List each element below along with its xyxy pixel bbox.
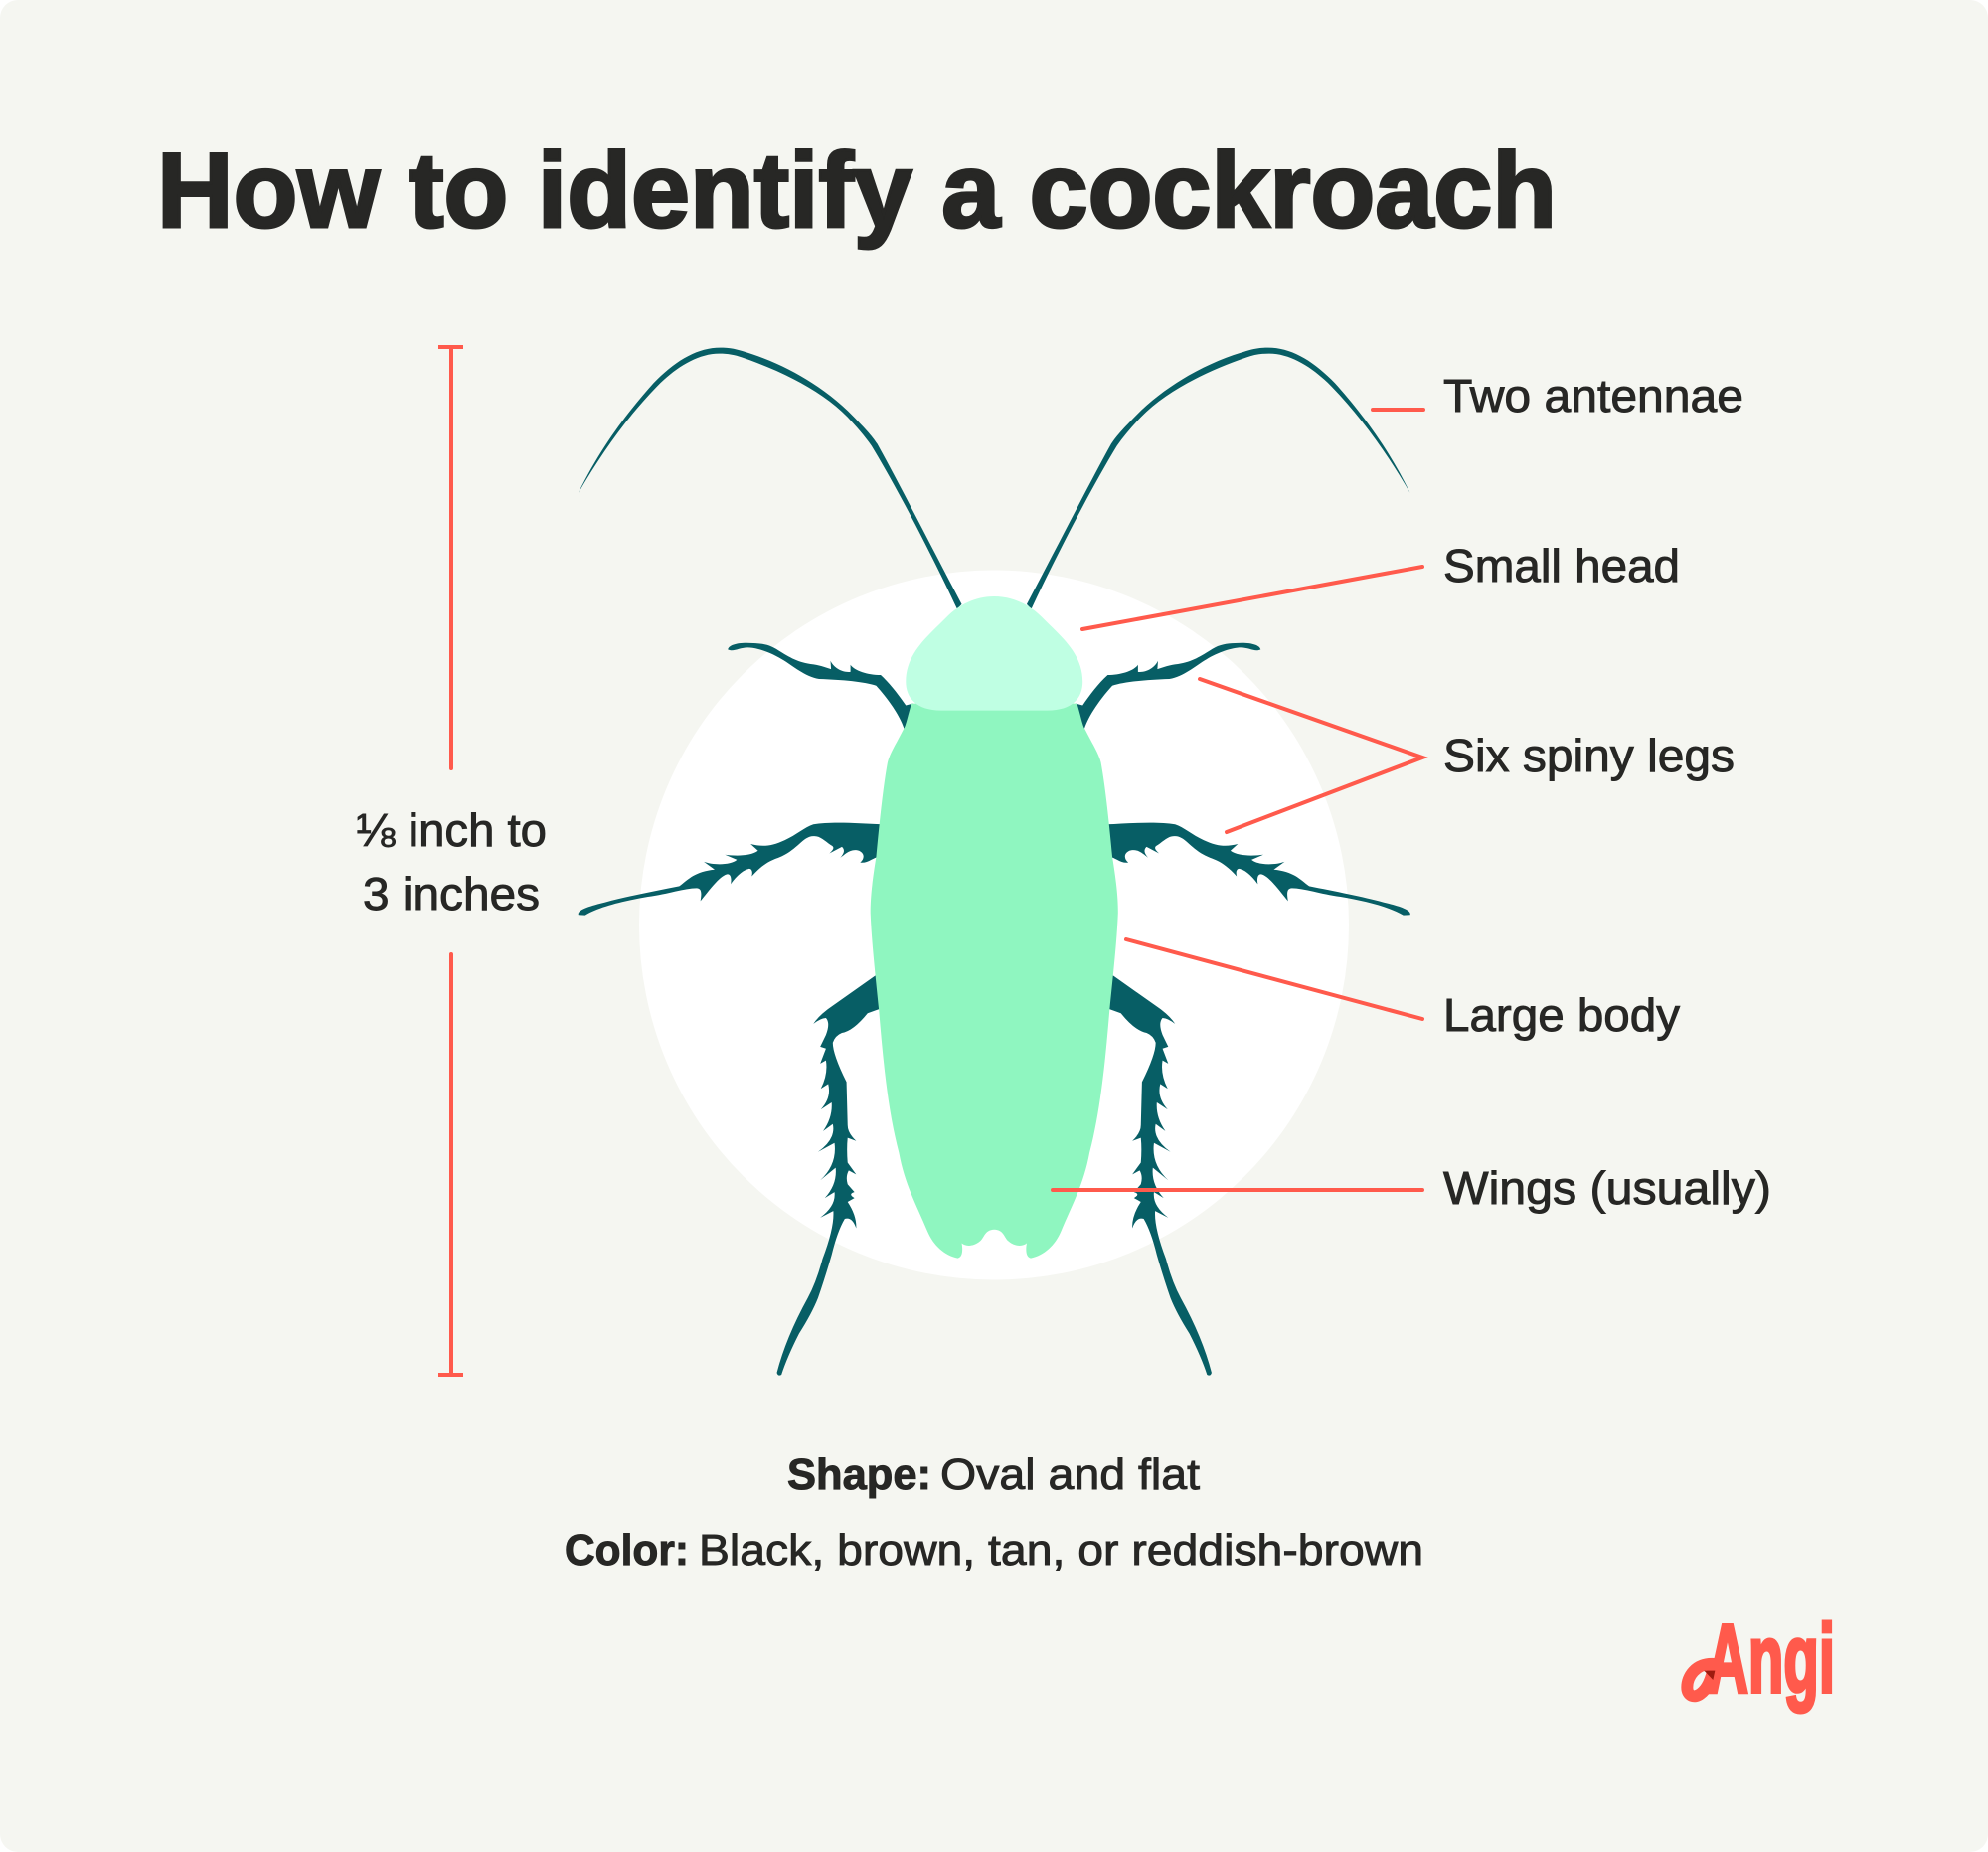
label: large body: Large body bbox=[1443, 989, 1680, 1041]
label: two antennae: Two antennae bbox=[1443, 370, 1743, 421]
shape description: Shape: bbox=[787, 1450, 931, 1499]
title: How to identify a cockroach bbox=[157, 130, 1557, 250]
right middle leg bbox=[1106, 823, 1410, 916]
white circle behind cockroach bbox=[639, 571, 1349, 1280]
left front leg bbox=[728, 643, 913, 731]
color description: Color: bbox=[565, 1526, 689, 1575]
cockroach body and wings bbox=[871, 704, 1118, 1259]
right front leg bbox=[1076, 643, 1260, 731]
shape description bbox=[787, 1450, 1200, 1499]
callout line: body bbox=[1126, 939, 1422, 1019]
label: small head: Small head bbox=[1443, 540, 1680, 591]
right hind leg bbox=[1103, 972, 1212, 1376]
shape description: Oval and flat bbox=[940, 1450, 1200, 1499]
right antenna bbox=[1027, 348, 1410, 609]
color description: Black, brown, tan, or reddish-brown bbox=[699, 1526, 1423, 1575]
cockroach illustration bbox=[579, 348, 1410, 1376]
callout line: antennae bbox=[1373, 408, 1423, 412]
Angi logo: Angi bbox=[1707, 1604, 1835, 1713]
cockroach head bbox=[906, 596, 1082, 711]
callout lines: legs bbox=[1200, 679, 1422, 832]
size measurement bracket bbox=[438, 347, 463, 1375]
callout line: head bbox=[1082, 567, 1422, 629]
size label line one: ⅛ inch to bbox=[356, 804, 547, 856]
size label line two: 3 inches bbox=[363, 868, 540, 920]
left antenna bbox=[579, 348, 962, 609]
callout line: wings bbox=[1053, 1188, 1422, 1192]
left middle leg bbox=[579, 823, 882, 916]
Angi logo bbox=[1687, 1604, 1835, 1713]
label: wings: Wings (usually) bbox=[1443, 1162, 1771, 1214]
left hind leg bbox=[777, 972, 885, 1376]
label: six spiny legs: Six spiny legs bbox=[1443, 730, 1735, 781]
